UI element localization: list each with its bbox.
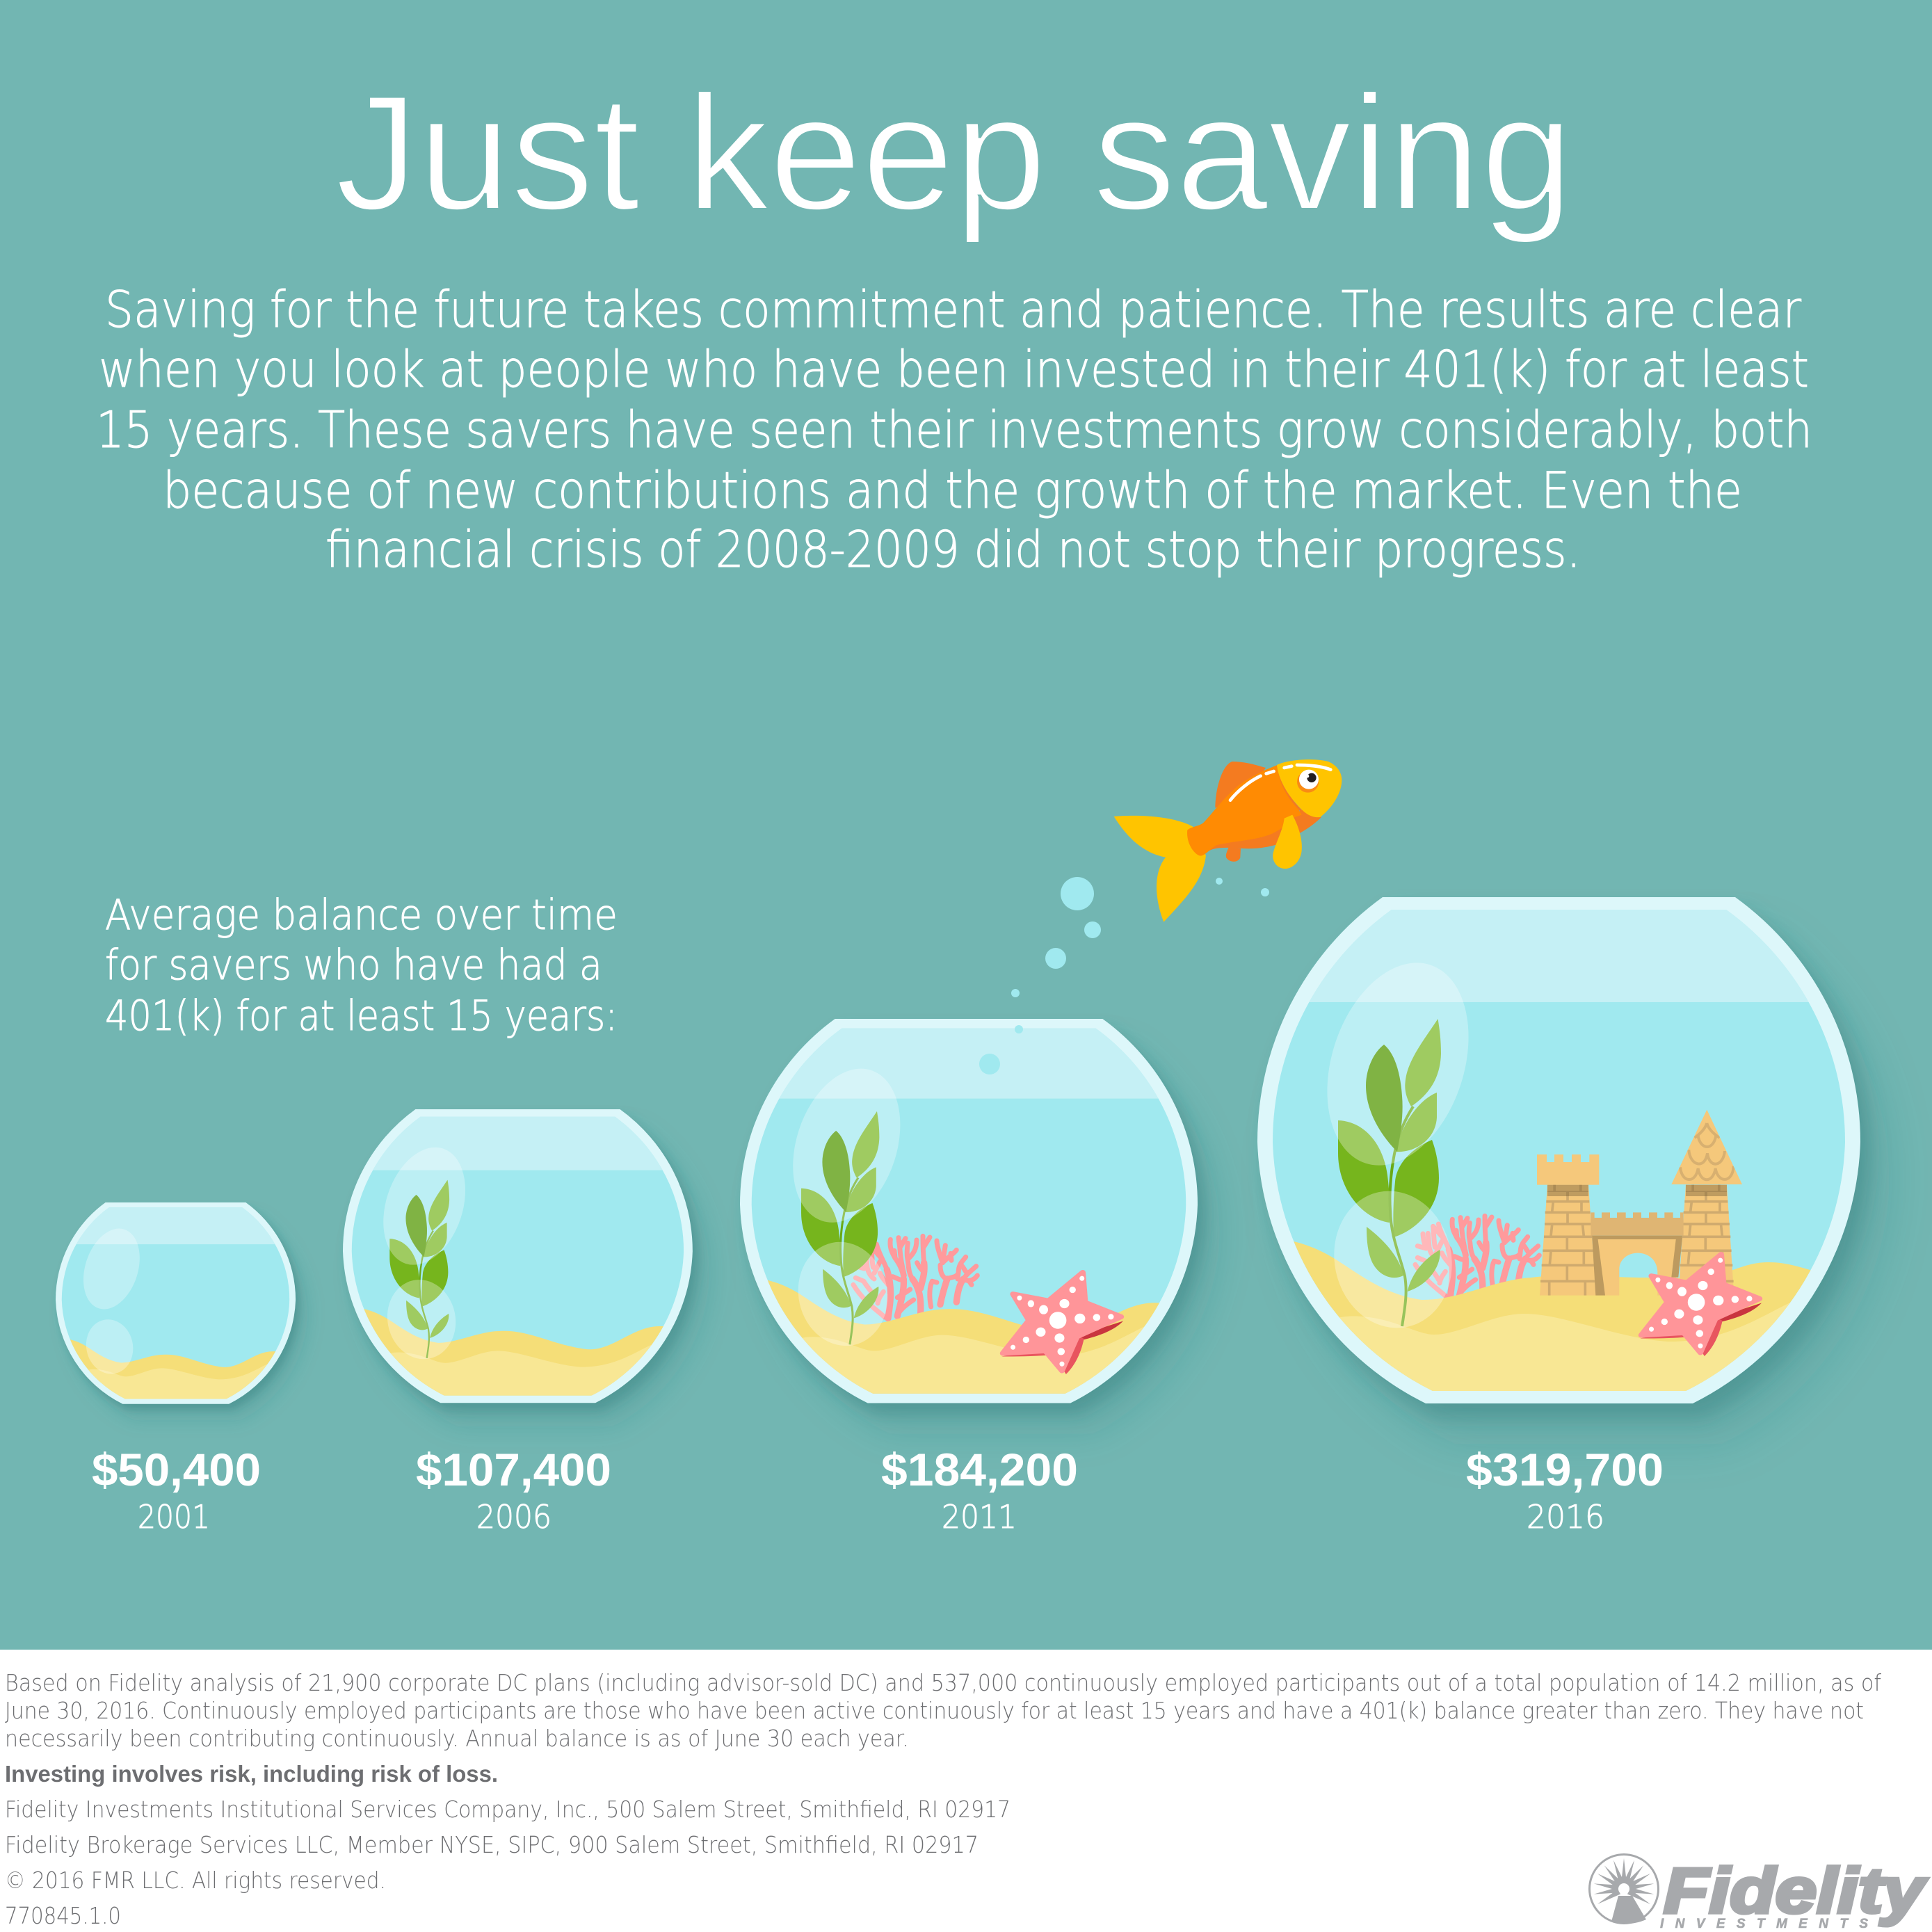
fishbowl: 2001 [56,1202,307,1420]
value: 2016: $319,700 [1466,1444,1664,1495]
chart caption: for savers who have had a [105,941,602,990]
value: 2006: $107,400 [416,1444,611,1495]
value: 2016 [1466,1444,1664,1536]
footnotes: 770845.1.0 [5,1902,121,1929]
footnotes: © 2016 FMR LLC. All rights reserved. [5,1867,386,1894]
footer panel [0,1650,1932,1932]
fishbowl: 2016 [1257,897,1890,1444]
value: 2006 [416,1444,611,1536]
value: 2011 [881,1444,1078,1536]
bubbles [1011,877,1269,1033]
intro paragraph: financial crisis of 2008-2009 did not stop their progress. [325,520,1581,579]
intro paragraph: because of new contributions and the growth of the market. Even the [163,461,1742,520]
fishbowl: 2006 [343,1109,709,1426]
chart caption [105,891,618,1040]
value: 2016: 2016 [1527,1498,1604,1536]
footnotes [5,1669,1881,1929]
title: Just keep saving [335,61,1573,245]
bubble inside bowl [979,1054,1000,1074]
starfish [1640,1255,1762,1356]
chart caption: Average balance over time [105,891,618,940]
sand castle [1537,1110,1742,1296]
Fidelity logo: INVESTMENTS [1660,1917,1868,1931]
value: 2011: 2011 [942,1498,1017,1536]
goldfish [1114,759,1342,922]
value: 2006: 2006 [476,1498,552,1536]
chart caption: 401(k) for at least 15 years: [105,992,618,1040]
Fidelity logo [1590,1854,1927,1931]
footnotes: Fidelity Investments Institutional Services Company, Inc., 500 Salem Street, Smithfield, RI 02917 [5,1796,1011,1823]
starfish [1001,1273,1123,1374]
value: 2001 [92,1444,261,1536]
Fidelity logo: Fidelity [1664,1855,1927,1926]
value: 2011: $184,200 [881,1444,1078,1495]
footnotes: Investing involves risk, including risk of loss. [5,1761,498,1787]
value: 2001: $50,400 [92,1444,261,1495]
intro paragraph [96,280,1812,579]
footnotes: necessarily been contributing continuously. Annual balance is as of June 30 each year. [5,1725,909,1752]
footnotes: Fidelity Brokerage Services LLC, Member NYSE, SIPC, 900 Salem Street, Smithfield, RI 02917 [5,1831,979,1858]
fishbowl: 2011 [740,1019,1220,1434]
value: 2001: 2001 [138,1498,210,1536]
